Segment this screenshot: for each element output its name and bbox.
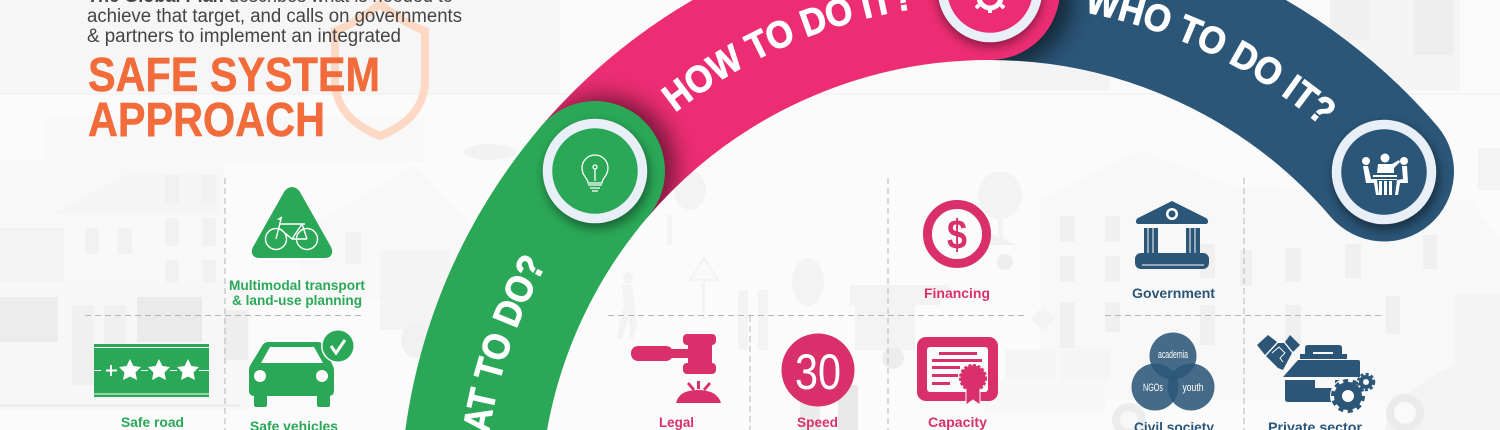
heading: safe system approach: APPROACH bbox=[88, 94, 325, 147]
icon: safe vehicle bbox=[249, 329, 355, 407]
intro text: & partners to implement an integrated bbox=[87, 26, 401, 47]
intro text: achieve that target, and calls on governments bbox=[87, 6, 462, 27]
icon: certificate bbox=[917, 337, 998, 405]
label: multimodal transport: & land-use planning bbox=[232, 292, 362, 308]
icon: private sector toolbox bbox=[1257, 335, 1374, 414]
heading: safe system approach: SAFE SYSTEM bbox=[88, 49, 380, 102]
band: how to do it bbox=[595, 0, 990, 171]
icon: meeting badge bbox=[1333, 124, 1439, 230]
band: who to do it bbox=[990, 0, 1384, 172]
icon: speed limit 30 bbox=[782, 334, 854, 406]
intro text bbox=[87, 0, 462, 47]
label: financing: Financing bbox=[924, 285, 990, 301]
dashed divider lines bbox=[85, 178, 1383, 430]
icon: gear badge bbox=[937, 0, 1043, 47]
icon: civil society venn: NGOs bbox=[1143, 382, 1163, 394]
icon: civil society venn: youth bbox=[1182, 382, 1204, 394]
heading: safe system approach bbox=[88, 49, 380, 147]
icon: dollar coin bbox=[928, 204, 986, 264]
label: multimodal transport: Multimodal transport bbox=[229, 277, 365, 293]
label: legal: Legal bbox=[659, 414, 694, 430]
label: safe road: Safe road bbox=[121, 414, 184, 430]
icon: civil society venn: academia bbox=[1158, 349, 1189, 361]
label: government: Government bbox=[1132, 285, 1215, 301]
icon: speed limit 30: 30 bbox=[795, 344, 841, 400]
icon: bicycle sign bbox=[252, 187, 332, 258]
label: capacity: Capacity bbox=[928, 414, 987, 430]
band: what to do bbox=[470, 171, 595, 430]
icon: dollar coin: $ bbox=[947, 211, 967, 258]
icon: safe road stars bbox=[94, 344, 209, 397]
icon: government building bbox=[1135, 201, 1209, 269]
label: multimodal transport bbox=[229, 277, 365, 308]
shield watermark bbox=[335, 4, 425, 136]
icon: gavel bbox=[631, 334, 721, 403]
label: speed: Speed bbox=[797, 414, 838, 430]
icon: civil society venn bbox=[1132, 332, 1214, 410]
icon: light bulb badge bbox=[544, 123, 650, 229]
